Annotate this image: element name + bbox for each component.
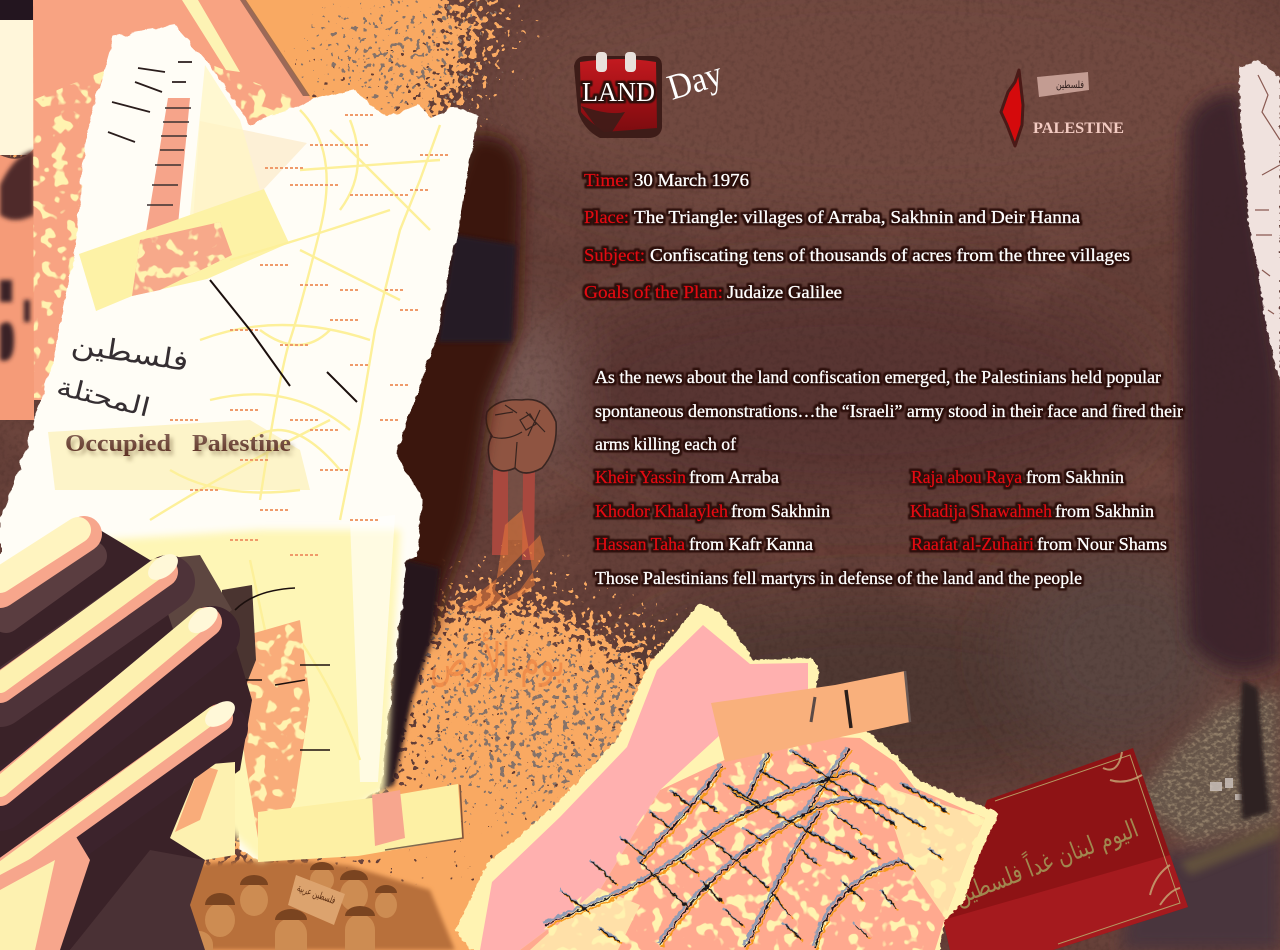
finger 1 [0, 530, 92, 618]
salmon parcel with ladder lines [108, 62, 192, 232]
Arabic map title: فلسطين [69, 327, 191, 378]
fact: place: Place: [584, 207, 629, 227]
narrative text block: Raafat al-Zuhairi [911, 534, 1034, 554]
tape strip upper [79, 189, 289, 311]
fact: subject: Subject: [584, 245, 645, 265]
protest photograph: فلسطين عربية [295, 883, 337, 907]
lower map details: salmon band, dark gap and cracks [222, 585, 463, 862]
tape on bottom map [711, 671, 910, 762]
heading: Land Day calendar icon: LAND [582, 77, 655, 107]
hand holding the map [0, 530, 252, 950]
right torn map paper [1239, 60, 1280, 380]
dark palm shadow [0, 530, 252, 950]
heading: Land Day calendar icon [574, 52, 662, 138]
narrative text block: Kheir Yassin [595, 467, 686, 487]
left edge strip behind map [0, 0, 36, 420]
shadow of left map [380, 135, 522, 640]
orange speckled mass bottom [150, 590, 680, 950]
red book cover [943, 748, 1188, 950]
fact: goals [584, 282, 842, 302]
salmon area with roads [520, 735, 985, 950]
narrative text block: Those Palestinians fell martyrs in defense of the land and the people [595, 568, 1082, 588]
narrative text block: Raja abou Raya [911, 467, 1022, 487]
narrative text block: Hassan Taha [595, 534, 685, 554]
dashed labels [170, 115, 450, 555]
narrative text block: spontaneous demonstrations…the “Israeli” army stood in their face and fired their [595, 401, 1183, 421]
tag: Arabic Palestine [1037, 72, 1089, 97]
bottom right village photo [1110, 670, 1280, 950]
salmon backing of left map [33, 0, 312, 400]
narrative text block: from Sakhnin [1026, 467, 1124, 487]
fact: subject: Confiscating tens of thousands of acres from the three villages [650, 245, 1130, 265]
tag: Arabic Palestine: فلسطين [1056, 80, 1084, 91]
red book cover: اليوم لبنان غداً فلسطين [949, 810, 1142, 911]
narrative text block: from Nour Shams [1037, 534, 1167, 554]
narrative text block [595, 367, 1183, 588]
fact: time: 30 March 1976 [634, 170, 749, 190]
pink area [480, 625, 808, 950]
cream triangular patch [193, 121, 307, 221]
fact: goals: Judaize Galilee [727, 282, 842, 302]
faded Arabic calligraphy on orange ground: يوم الأرض [430, 631, 565, 688]
bottom torn map sheet [455, 603, 999, 950]
narrative text block: from Sakhnin [1055, 501, 1154, 521]
orange forearm flare over speckle [460, 510, 545, 612]
finger 3 [0, 602, 223, 803]
fact: place: The Triangle: villages of Arraba, Sakhnin and Deir Hanna [634, 207, 1080, 227]
map cracks [210, 280, 357, 402]
finger 2 [0, 549, 183, 700]
narrative text block: Khodor Khalayleh [595, 501, 728, 521]
heading: Day: Day [663, 53, 727, 108]
cream lower region [100, 530, 400, 862]
narrative text block: from Sakhnin [731, 501, 830, 521]
icon: map of Palestine [1001, 70, 1023, 146]
label: Occupied Palestine [65, 430, 294, 461]
orange speckled mass top [30, 0, 505, 260]
label: Occupied Palestine: Occupied [68, 434, 174, 461]
shadow behind right paper [1182, 92, 1280, 671]
narrative text block: As the news about the land confiscation emerged, the Palestinians held popular [595, 367, 1161, 387]
label: Occupied Palestine: Occupied [65, 430, 171, 457]
fact: goals: Goals of the Plan: [584, 282, 723, 302]
narrative text block: arms killing each of [595, 434, 736, 454]
fact: time: Time: [584, 170, 629, 190]
label: Occupied Palestine: Palestine [195, 434, 294, 461]
fist and forearm sketch [486, 399, 556, 560]
facts block [584, 170, 1130, 302]
fact: time [584, 170, 749, 190]
label: Occupied Palestine: Palestine [192, 430, 291, 457]
left torn map sheet [0, 25, 478, 862]
finger 4 [0, 696, 240, 889]
map roads [150, 110, 440, 760]
narrative text block: Khadija Shawahneh [910, 501, 1052, 521]
narrative text block: from Kafr Kanna [689, 534, 813, 554]
left torn map sheet: المحتلة [53, 372, 153, 424]
calendar rings [596, 52, 636, 72]
protest photograph [155, 860, 455, 950]
narrative text block: from Arraba [689, 467, 779, 487]
label: PALESTINE: PALESTINE [1033, 120, 1124, 137]
wrist [0, 835, 90, 950]
